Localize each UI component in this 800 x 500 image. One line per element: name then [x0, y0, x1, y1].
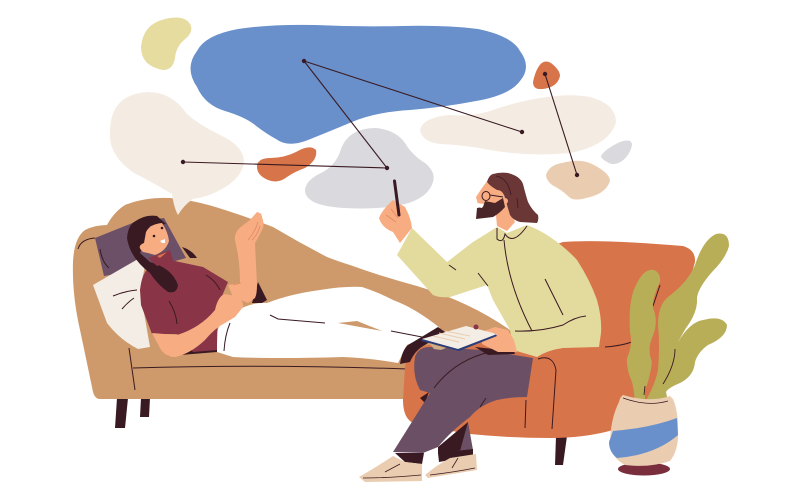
back shoe — [425, 454, 477, 478]
glasses — [482, 192, 503, 200]
cloud: small orange right blob — [533, 62, 560, 89]
potted plant — [609, 234, 729, 476]
eyes — [153, 227, 163, 237]
hand lines — [233, 222, 260, 285]
cloud: grey blob — [305, 128, 434, 208]
clip — [474, 324, 478, 330]
dark knee shadow — [400, 327, 445, 364]
paper text lines — [433, 331, 470, 342]
line: orange to peach — [545, 74, 577, 175]
paper — [422, 326, 497, 349]
cloud: small grey blob — [601, 141, 632, 164]
neck — [495, 205, 515, 231]
cloud: small orange blob — [257, 147, 316, 181]
hair strands — [496, 176, 518, 208]
fingers under clipboard — [429, 343, 446, 350]
hair — [487, 173, 538, 223]
pot saucer — [618, 462, 670, 476]
clipboard hand shadow — [475, 347, 515, 355]
woman patient — [93, 212, 440, 363]
line: left to centre — [183, 162, 387, 168]
lower arm — [152, 294, 243, 357]
chaise seam lines — [78, 238, 407, 390]
mouth — [477, 203, 484, 208]
chair leg — [555, 420, 613, 465]
face — [140, 223, 169, 255]
chaise longue — [73, 198, 520, 428]
leaf vein lines — [644, 349, 675, 395]
raised arm and hand — [228, 212, 264, 303]
pot rim line — [623, 398, 668, 403]
chaise legs — [115, 398, 150, 428]
chaise body — [73, 198, 520, 399]
beard — [476, 198, 505, 219]
leaf right big — [645, 234, 729, 402]
collar shadow — [157, 252, 167, 258]
armchair — [403, 241, 695, 465]
pants lines — [434, 352, 490, 407]
raised fist — [379, 200, 412, 243]
therapist lower hand — [482, 327, 517, 352]
cloud: beige right blob — [420, 95, 616, 154]
shoe lines — [363, 458, 475, 478]
clipboard — [421, 324, 497, 351]
shirt fold lines — [169, 275, 220, 324]
chair body — [403, 241, 695, 438]
white pillow — [93, 259, 150, 349]
back leg — [460, 422, 473, 451]
constellation lines — [183, 61, 577, 175]
face — [476, 180, 507, 215]
line: top to right — [304, 61, 522, 132]
mouth — [160, 239, 165, 243]
trouser lines — [224, 315, 422, 351]
leaf left — [627, 270, 660, 402]
neck collar — [148, 250, 173, 266]
front shoe — [359, 456, 422, 482]
cloud: peach blob — [546, 161, 610, 200]
dark shadow under arm — [155, 247, 267, 356]
shirt collar and seam lines — [449, 226, 586, 331]
hair — [127, 216, 178, 292]
constellation dots — [181, 59, 579, 177]
therapist — [359, 173, 601, 482]
cloud: blue blob — [190, 25, 526, 144]
pillow crease lines — [100, 249, 137, 309]
thought clouds — [110, 18, 632, 215]
tan gap between legs — [338, 321, 382, 331]
pants — [393, 347, 533, 453]
finger lines — [386, 204, 400, 222]
cloud: yellow blob — [141, 18, 191, 70]
chair arm seam lines — [525, 285, 660, 429]
shirt — [397, 225, 601, 357]
purple pillow — [95, 218, 186, 276]
pot blue band — [609, 418, 678, 458]
maroon shirt — [140, 260, 228, 352]
dark leg shadow — [420, 392, 468, 454]
legs in white trousers — [217, 287, 440, 363]
pen — [394, 181, 399, 215]
line: top to centre — [304, 61, 387, 168]
socks — [395, 449, 473, 464]
clipboard board — [421, 333, 497, 351]
cloud: beige speech bubble — [110, 92, 244, 215]
pot — [610, 395, 678, 466]
ear — [502, 198, 508, 204]
